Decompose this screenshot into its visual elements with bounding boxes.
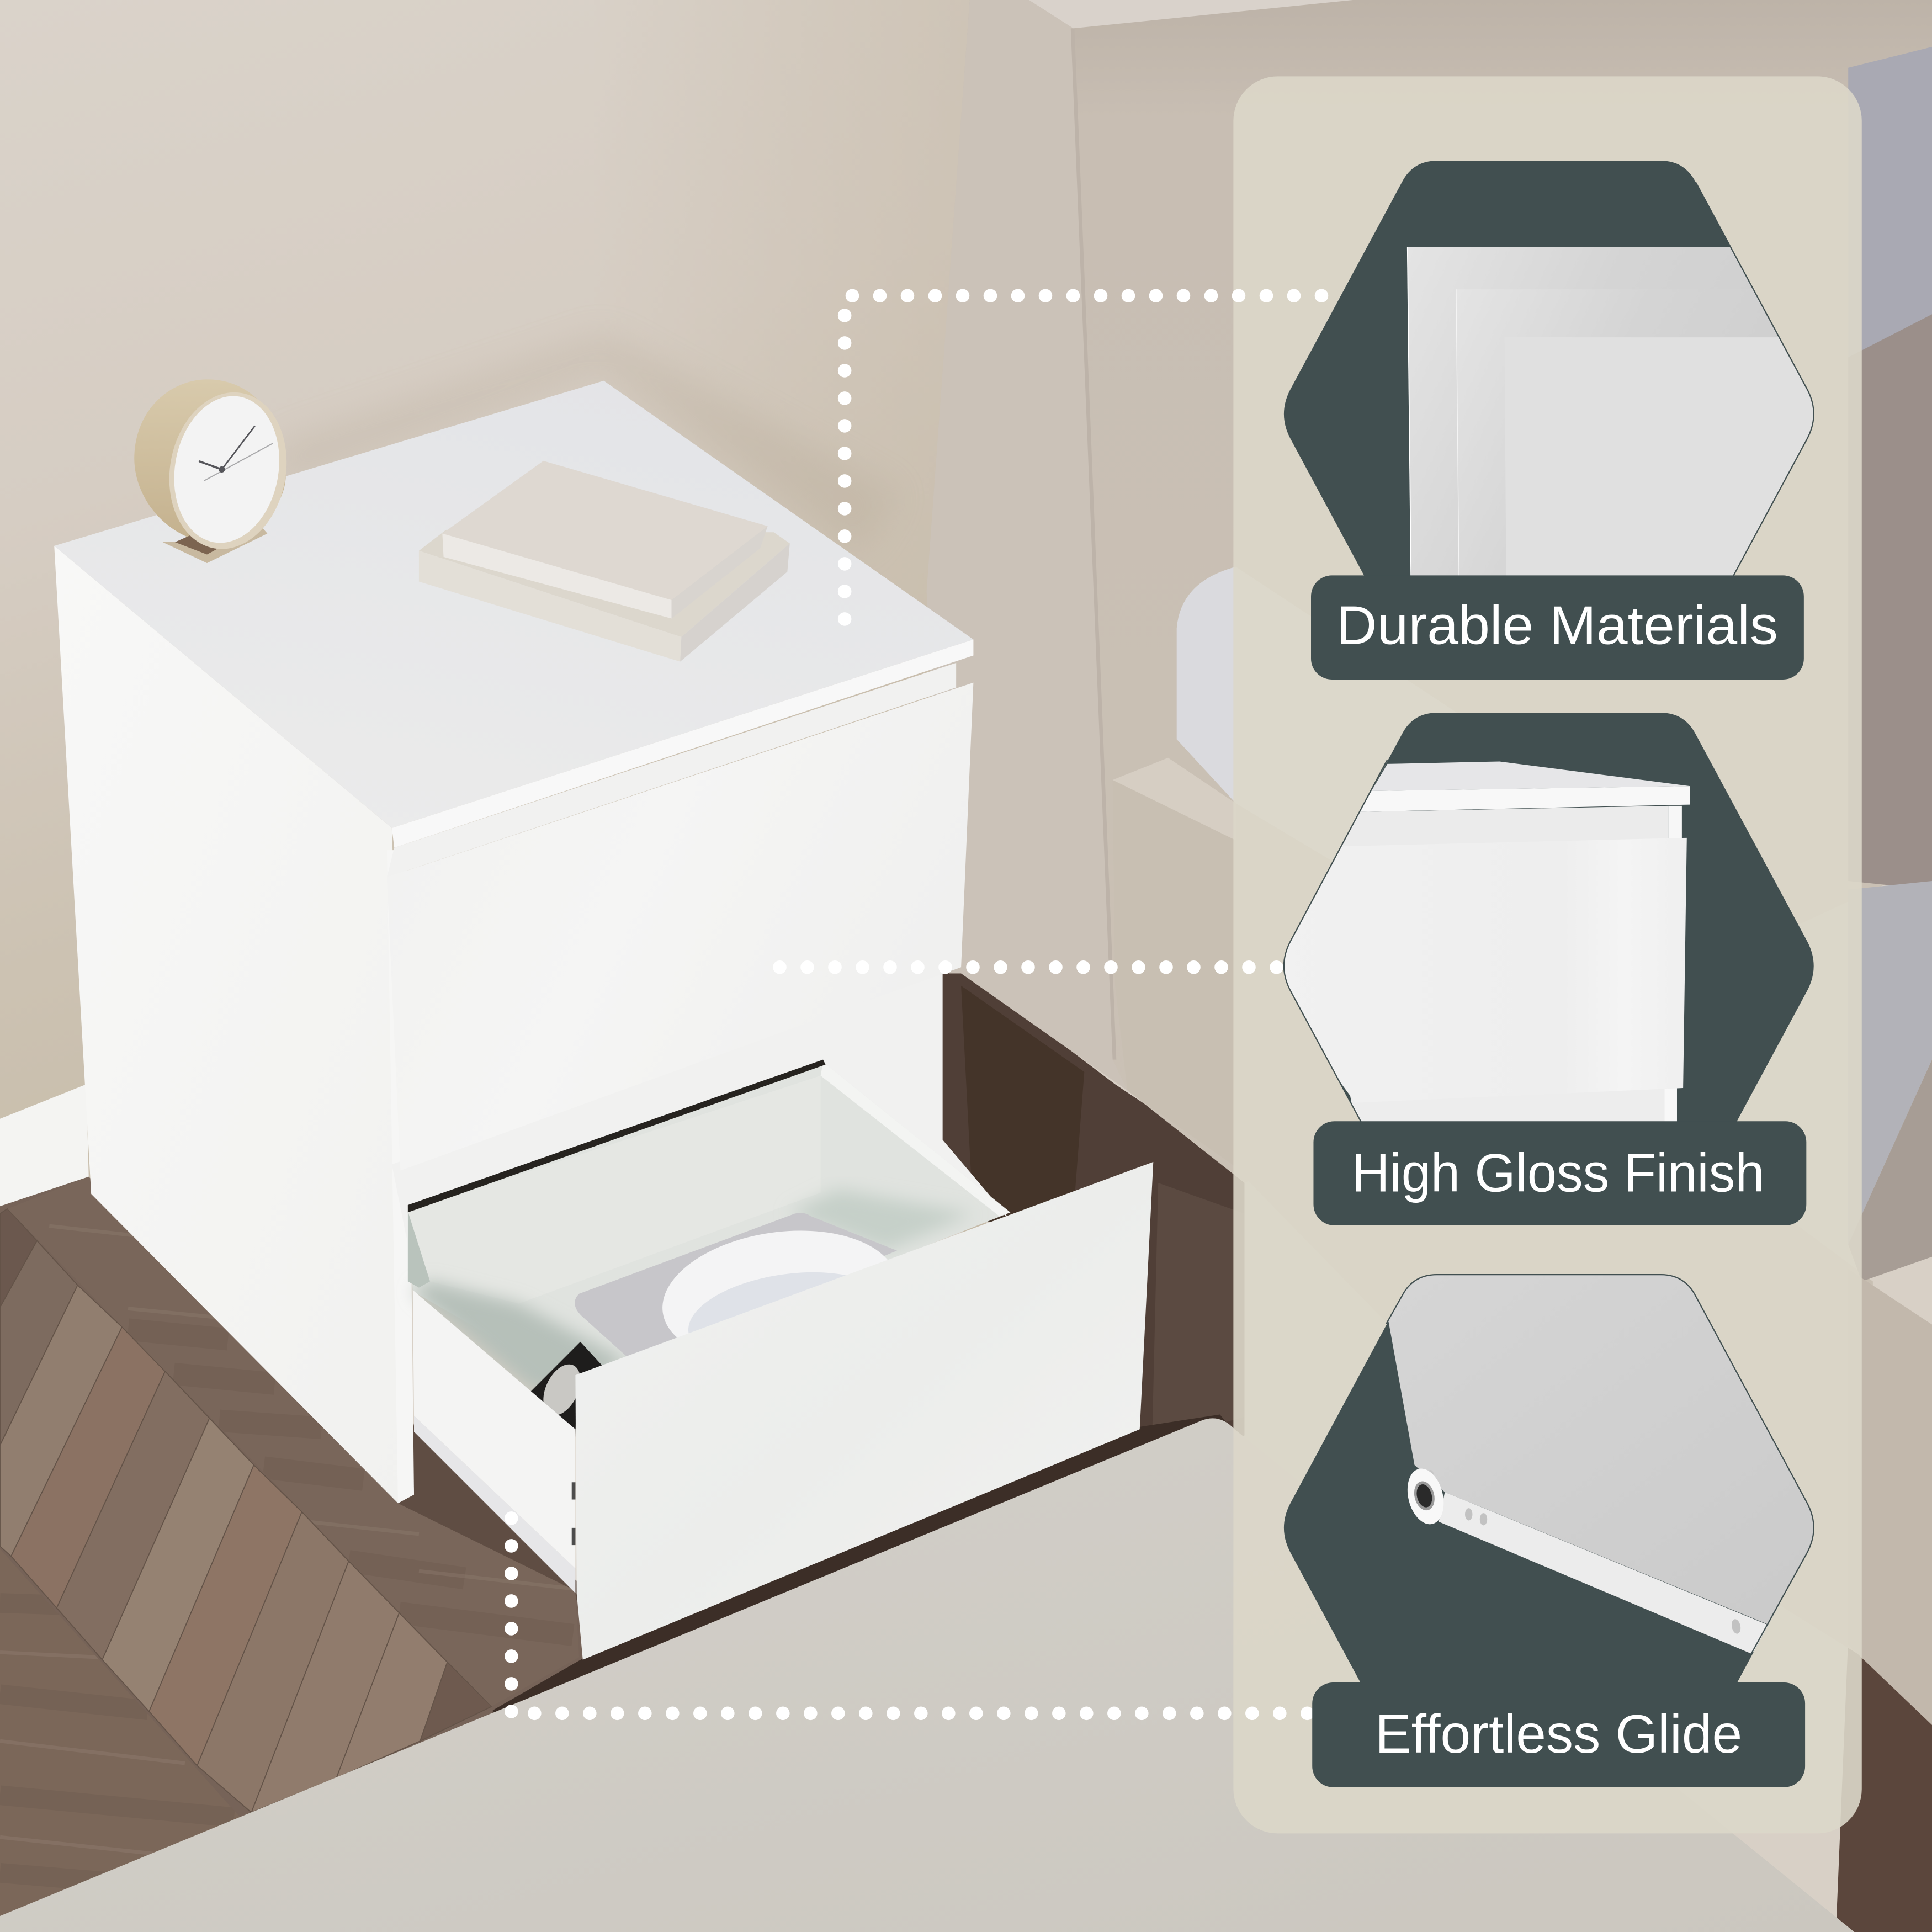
upper band below top [387, 663, 956, 877]
layered material sheets [1406, 247, 1813, 575]
open drawer front [575, 1162, 1153, 1660]
hexagon background [1284, 1275, 1814, 1781]
feature: effortless glide [1284, 1269, 1848, 1787]
top surface [54, 381, 973, 828]
drawer rail close-up [1388, 1275, 1813, 1654]
wall corner shading [0, 0, 986, 1232]
herringbone planks [0, 1209, 492, 1812]
hexagon outline [1695, 182, 1814, 646]
nightstand [54, 379, 1153, 1660]
hexagon outline [1284, 760, 1402, 1198]
upper drawer front [387, 683, 973, 1171]
hexagon outline [1386, 1275, 1814, 1657]
label: effortless glide: Effortless Glide [1375, 1703, 1742, 1764]
front post [387, 850, 414, 1503]
dotted connector: high gloss finish [779, 964, 1276, 970]
mattress sheet [1177, 567, 1479, 949]
label: durable materials [1311, 575, 1804, 680]
glasses [530, 1342, 609, 1437]
label: effortless glide [1312, 1682, 1805, 1787]
bed side rail [1113, 758, 1873, 1663]
clock face [163, 388, 290, 551]
hexagon background [1284, 713, 1814, 1219]
clock rim [157, 383, 299, 559]
label: durable materials: Durable Materials [1336, 595, 1778, 655]
bed headboard [927, 0, 1932, 1183]
grey blanket [1848, 881, 1932, 1244]
books [419, 461, 790, 662]
floor [0, 967, 1932, 1932]
clock hands [200, 426, 272, 481]
clock [134, 379, 299, 563]
label: high gloss finish [1313, 1121, 1806, 1225]
baseboard [0, 1084, 89, 1206]
glide wheel [1402, 1465, 1449, 1528]
upper book [442, 461, 768, 600]
feature: durable materials [1284, 161, 1848, 680]
nightstand shadow on wall [277, 333, 899, 554]
open gap behind drawers [392, 967, 1010, 1238]
rug [0, 1418, 1854, 1932]
taupe blanket [1848, 1060, 1932, 1281]
feature panel [1233, 76, 1862, 1833]
top front edge [392, 639, 973, 848]
side panel [54, 546, 414, 1503]
mauve pillow [1848, 314, 1932, 890]
hexagon background [1284, 161, 1814, 667]
upper chevron band [7, 1177, 579, 1707]
feature: high gloss finish [1269, 713, 1814, 1225]
lower book [419, 530, 790, 637]
dotted connector: effortless glide [511, 1516, 1307, 1713]
wall [0, 0, 986, 1232]
glossy drawer close-up [1269, 761, 1690, 1124]
tablet [575, 1213, 897, 1360]
open drawer side [413, 1290, 575, 1593]
drawer interior [408, 1060, 1010, 1437]
bed frame base [1848, 1269, 1932, 1725]
clock stand [163, 524, 267, 563]
dotted connector: durable materials [845, 296, 1321, 620]
clock body [134, 379, 286, 543]
label: high gloss finish: High Gloss Finish [1352, 1142, 1764, 1203]
lower chevron band [0, 1650, 185, 1855]
grey pillow [1848, 47, 1932, 370]
headphones [654, 1216, 906, 1376]
